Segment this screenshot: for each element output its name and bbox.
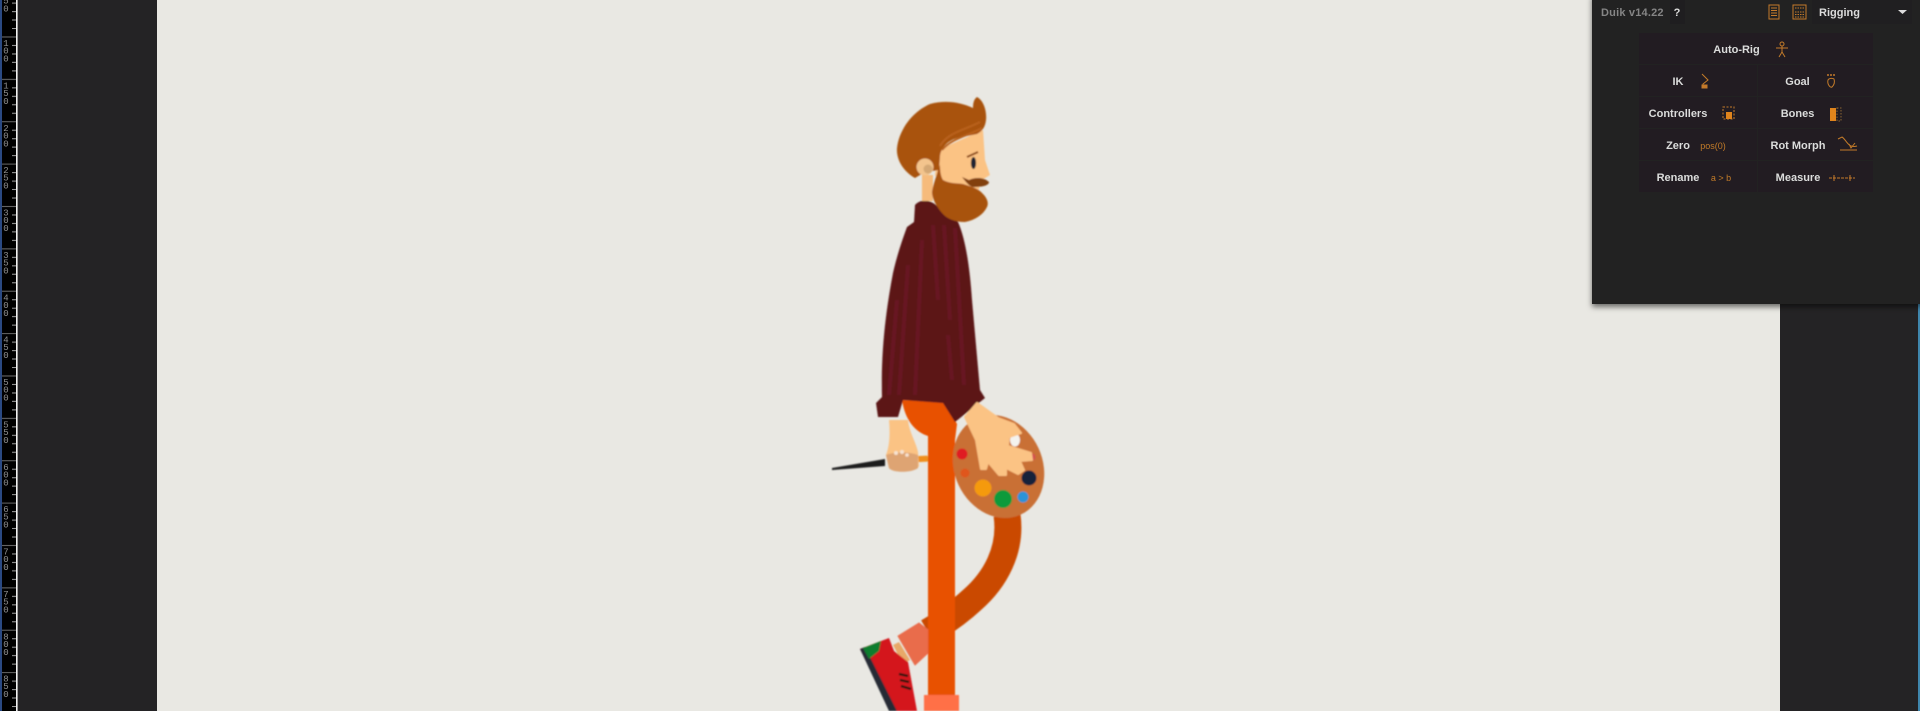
- vertical ruler: 5: [3, 174, 9, 184]
- vertical ruler: 7: [3, 590, 9, 600]
- vertical ruler: 0: [3, 521, 9, 531]
- button: IK: [1639, 65, 1757, 96]
- back leg: [928, 515, 1008, 632]
- palette: [936, 400, 1061, 533]
- button: Rename: Rename: [1657, 172, 1699, 184]
- hair wave highlight: [940, 122, 982, 150]
- vertical ruler: 2: [3, 166, 9, 176]
- right edge accent: [1918, 304, 1920, 711]
- eye: [971, 157, 976, 169]
- button: Auto-Rig: Auto-Rig: [1713, 44, 1760, 56]
- button: Bones: Bones: [1781, 108, 1814, 120]
- Duik panel: [1592, 0, 1920, 304]
- vertical ruler: 5: [3, 420, 9, 430]
- button: Zero: Zero: [1666, 140, 1690, 152]
- mode selector: Rigging: [1819, 7, 1860, 19]
- vertical ruler: 0: [3, 54, 9, 64]
- icon: notes: [1769, 5, 1779, 19]
- button: Controllers: Controllers: [1649, 108, 1707, 120]
- button: Bones: [1758, 97, 1873, 128]
- shoe: [860, 638, 917, 711]
- ankle: [893, 642, 910, 664]
- vertical ruler: 8: [3, 632, 9, 642]
- vertical ruler: 0: [3, 648, 9, 658]
- vertical ruler: 0: [3, 182, 9, 192]
- button: Rename: a > b: [1711, 173, 1731, 183]
- vertical ruler: 0: [3, 690, 9, 700]
- button: Measure: [1758, 161, 1873, 192]
- vertical ruler: 0: [3, 605, 9, 615]
- vertical ruler: 5: [3, 597, 9, 607]
- vertical ruler: 5: [3, 682, 9, 692]
- button: Rot Morph: Rot Morph: [1771, 140, 1826, 152]
- eyebrow: [967, 152, 978, 157]
- button: Auto-Rig: [1639, 33, 1873, 64]
- vertical ruler: 5: [3, 378, 9, 388]
- front leg: [928, 420, 955, 696]
- hips: [902, 400, 957, 440]
- vertical ruler: 0: [3, 309, 9, 319]
- vertical ruler: 0: [3, 478, 9, 488]
- panel title: Duik v14.22: [1601, 7, 1664, 19]
- help button: ?: [1674, 7, 1681, 19]
- sweater: [876, 201, 985, 422]
- button: Zero: pos(0): [1700, 141, 1726, 151]
- vertical ruler: [0, 0, 18, 711]
- vertical ruler: 0: [3, 131, 9, 141]
- vertical ruler: 0: [3, 266, 9, 276]
- vertical ruler: 5: [3, 89, 9, 99]
- vertical ruler: 0: [3, 301, 9, 311]
- vertical ruler: 5: [3, 513, 9, 523]
- vertical ruler: 1: [3, 39, 9, 49]
- sock: [924, 695, 959, 711]
- vertical ruler: 7: [3, 548, 9, 558]
- button: Controllers: [1639, 97, 1757, 128]
- button: Rot Morph: [1758, 129, 1873, 160]
- vertical ruler: 3: [3, 208, 9, 218]
- vertical ruler: 5: [3, 343, 9, 353]
- icon: calculator: [1793, 5, 1806, 19]
- vertical ruler: 0: [3, 216, 9, 226]
- vertical ruler: 0: [3, 394, 9, 404]
- vertical ruler: 0: [3, 4, 9, 14]
- help button: [1670, 0, 1685, 24]
- vertical ruler: 3: [3, 251, 9, 261]
- vertical ruler: 0: [3, 351, 9, 361]
- vertical ruler: 0: [3, 640, 9, 650]
- vertical ruler: 0: [3, 470, 9, 480]
- vertical ruler: 0: [3, 46, 9, 56]
- neck: [922, 175, 933, 201]
- vertical ruler: 0: [3, 555, 9, 565]
- vertical ruler: 4: [3, 336, 9, 346]
- mode selector: [1812, 0, 1912, 24]
- vertical ruler: 6: [3, 463, 9, 473]
- vertical ruler: 0: [3, 97, 9, 107]
- button: Goal: [1758, 65, 1873, 96]
- button grid: [1639, 33, 1873, 192]
- button: Zero: [1639, 129, 1757, 160]
- vertical ruler: 0: [3, 139, 9, 149]
- button: Goal: Goal: [1785, 76, 1810, 88]
- sweater ribs: [889, 225, 964, 395]
- head: [897, 97, 990, 222]
- mustache: [962, 177, 989, 187]
- face: [935, 130, 990, 195]
- vertical ruler: 5: [3, 428, 9, 438]
- vertical ruler: 0: [3, 386, 9, 396]
- hair: [897, 97, 986, 178]
- character: bearded painter with bent leg: [832, 97, 1061, 711]
- vertical ruler: 0: [3, 224, 9, 234]
- left arm and hand with brush: [832, 420, 928, 472]
- vertical ruler: 0: [3, 563, 9, 573]
- ear: [916, 158, 934, 176]
- vertical ruler: 8: [3, 675, 9, 685]
- vertical ruler: 5: [3, 258, 9, 268]
- vertical ruler: 1: [3, 81, 9, 91]
- beard: [932, 165, 988, 222]
- vertical ruler: 4: [3, 293, 9, 303]
- vertical ruler: 0: [3, 436, 9, 446]
- vertical ruler: 6: [3, 505, 9, 515]
- right hand on palette: [965, 403, 1032, 475]
- button: Measure: Measure: [1776, 172, 1820, 184]
- button: IK: IK: [1672, 76, 1684, 88]
- foot sock: [898, 623, 928, 665]
- vertical ruler: 2: [3, 124, 9, 134]
- button: Rename: [1639, 161, 1757, 192]
